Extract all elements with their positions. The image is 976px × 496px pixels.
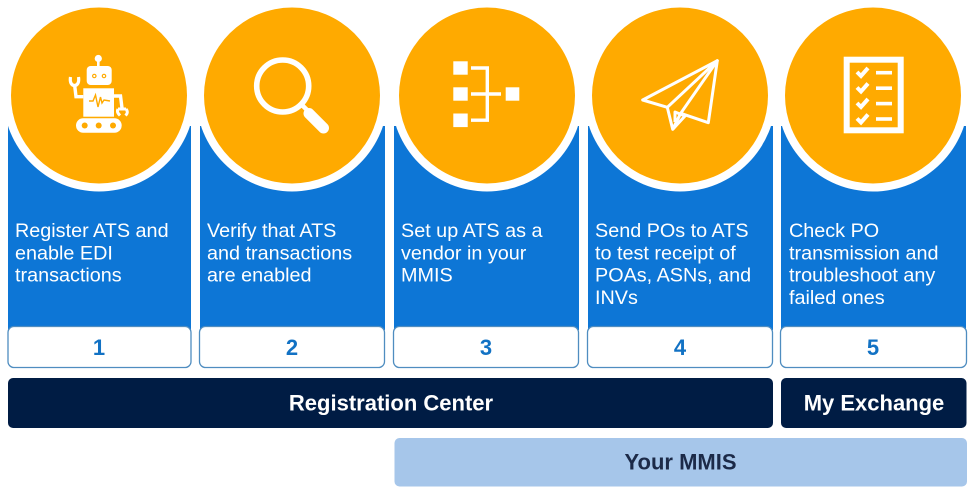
icon: checklist	[847, 60, 901, 130]
panel: step 1 background	[8, 126, 191, 330]
circle: step 3	[391, 0, 583, 192]
text: step 5 description: failed ones	[789, 287, 885, 309]
text: step 5 description	[789, 220, 939, 309]
bar: My Exchange: My Exchange	[804, 390, 944, 416]
text: step 4 description: Send POs to ATS	[595, 220, 749, 242]
text: step 2 description: and transactions	[207, 242, 352, 264]
text: step 4 description: POAs, ASNs, and	[595, 264, 751, 286]
icon: flow hierarchy	[453, 61, 519, 127]
circle: step 4	[584, 0, 776, 192]
number box: 5: 5	[867, 335, 879, 360]
bar: My Exchange	[781, 378, 966, 428]
number box: 1: 1	[93, 335, 105, 360]
panel: step 4 background	[588, 126, 773, 330]
text: step 3 description: Set up ATS as a	[401, 220, 542, 242]
number box: 4: 4	[674, 335, 687, 360]
text: step 2 description: are enabled	[207, 264, 312, 286]
circle: step 2	[196, 0, 388, 192]
number box: 2: 2	[286, 335, 298, 360]
step 1: register ATS	[3, 0, 195, 368]
number box: 1	[8, 326, 191, 368]
bar: Registration Center: Registration Center	[289, 390, 494, 416]
panel: step 2 background	[200, 126, 385, 330]
text: step 4 description: to test receipt of	[595, 242, 736, 264]
number box: 4	[588, 326, 772, 368]
circle: step 1	[3, 0, 195, 192]
text: step 1 description: Register ATS and	[15, 220, 169, 242]
panel: step 3 background	[394, 126, 579, 330]
step 5: check transmission	[777, 0, 969, 368]
text: step 1 description: enable EDI	[15, 242, 113, 264]
icon: paper plane	[643, 61, 717, 129]
text: step 3 description: MMIS	[401, 264, 453, 286]
text: step 5 description: transmission and	[789, 242, 939, 264]
text: step 3 description: vendor in your	[401, 242, 527, 264]
number box: 5	[780, 326, 966, 368]
circle: step 5	[777, 0, 969, 192]
text: step 2 description: Verify that ATS	[207, 220, 336, 242]
text: step 4 description	[595, 220, 751, 309]
text: step 5 description: Check PO	[789, 220, 879, 242]
number box: 3	[394, 326, 578, 368]
icon: magnifying glass	[257, 60, 324, 128]
text: step 2 description	[207, 220, 352, 286]
text: step 1 description	[15, 220, 169, 286]
text: step 4 description: INVs	[595, 287, 638, 309]
number box: 2	[200, 326, 384, 368]
panel: step 5 background	[781, 126, 966, 330]
text: step 1 description: transactions	[15, 264, 122, 286]
step 4: send POs	[584, 0, 776, 368]
text: step 5 description: troubleshoot any	[789, 264, 935, 286]
text: step 3 description	[401, 220, 542, 286]
bar: Your MMIS	[394, 438, 967, 486]
icon: robot	[70, 55, 127, 133]
bar: Your MMIS: Your MMIS	[624, 450, 737, 474]
bar: Registration Center	[8, 378, 773, 428]
step 3: set up vendor	[391, 0, 583, 368]
step 2: verify	[196, 0, 388, 368]
number box: 3: 3	[480, 335, 492, 360]
